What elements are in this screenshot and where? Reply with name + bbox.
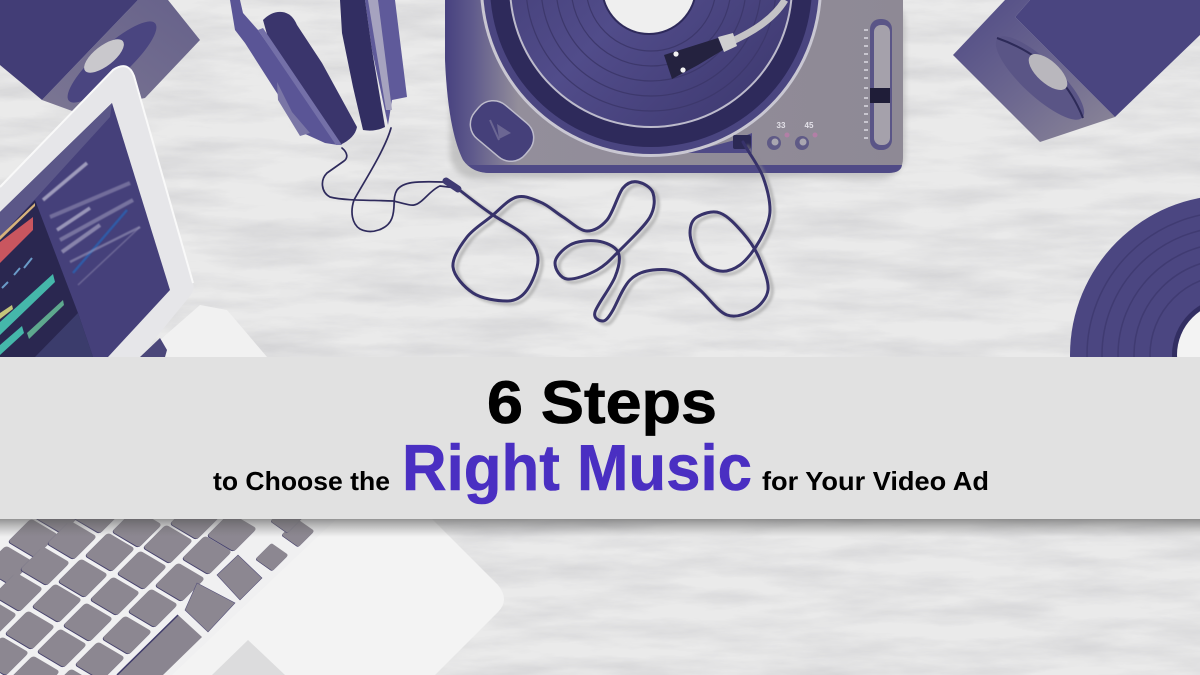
left cup plates xyxy=(277,82,310,136)
icon: headphones xyxy=(230,0,407,145)
red track xyxy=(0,217,33,263)
cable: shadow xyxy=(457,145,774,324)
icon: turntable xyxy=(445,0,905,178)
code text lines xyxy=(43,163,140,285)
headshell xyxy=(664,38,723,79)
band shadow xyxy=(0,519,1200,537)
blue notes on sidebar xyxy=(2,258,32,288)
screen xyxy=(0,103,170,357)
space bar xyxy=(117,615,202,675)
tonearm xyxy=(728,0,785,43)
icon: laptop screen xyxy=(0,66,267,357)
deck bottom edge xyxy=(468,165,902,173)
screen sidebar xyxy=(0,200,93,357)
deck body xyxy=(445,0,903,173)
deck shadow xyxy=(450,0,905,178)
left ear pad xyxy=(263,12,357,145)
icon: turntable: 45 xyxy=(805,121,814,130)
cable socket xyxy=(733,135,751,149)
orange rule xyxy=(0,203,35,240)
bezel xyxy=(0,66,194,357)
cable: headphone wires and turntable lead xyxy=(322,128,770,321)
teal tracks xyxy=(0,274,64,355)
title band xyxy=(0,357,1200,519)
icon: vinyl record at right xyxy=(1070,195,1200,515)
trackpad xyxy=(212,640,285,675)
icon: right speaker xyxy=(953,0,1200,142)
right cup stripe xyxy=(368,0,392,110)
subheading left: to Choose the xyxy=(213,466,390,496)
subheading right: for Your Video Ad xyxy=(762,466,989,496)
right shift key xyxy=(217,555,262,600)
keyboard keys xyxy=(0,494,315,675)
command key xyxy=(185,583,235,632)
platter and record xyxy=(480,0,822,157)
keyboard well xyxy=(0,519,336,675)
speed labels: 33 xyxy=(777,121,786,130)
icon: left speaker xyxy=(0,0,200,113)
laptop palm rest xyxy=(170,519,504,675)
icon: laptop base and keyboard xyxy=(0,494,504,675)
left pad stripe xyxy=(258,28,342,145)
record label xyxy=(603,0,695,33)
heading: 6 Steps: 6 Steps xyxy=(487,369,717,436)
pitch slider xyxy=(864,19,892,150)
left ear cup housing xyxy=(230,0,338,145)
right ear cup housing xyxy=(365,0,407,125)
speed knobs xyxy=(767,132,818,150)
laptop hinge xyxy=(160,305,267,357)
screen top bar xyxy=(0,103,112,237)
right ear pad xyxy=(340,0,385,131)
start button xyxy=(463,93,541,169)
heading: Right Music: Right Music xyxy=(402,431,752,504)
sidebar bottom detail xyxy=(35,313,93,357)
